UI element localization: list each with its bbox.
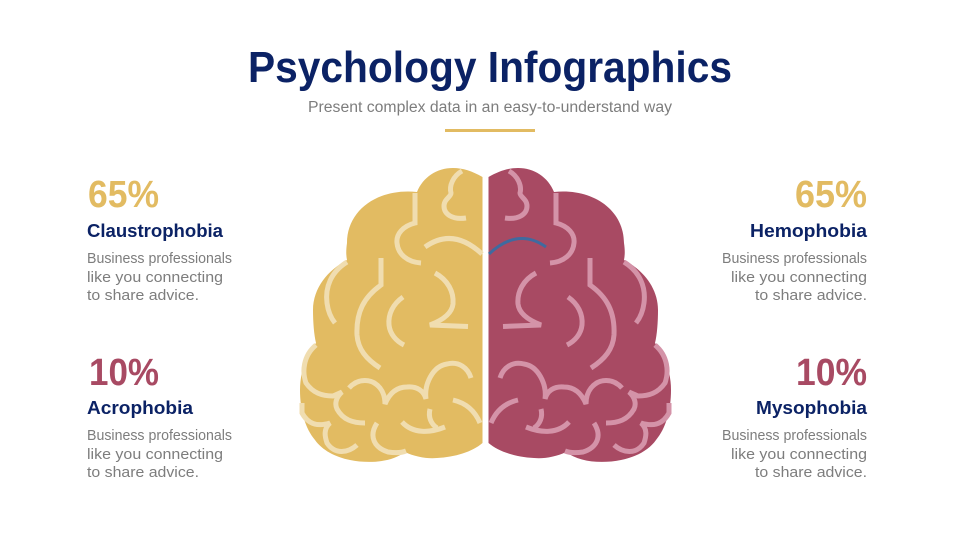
- text: mysophobia description: like you connecting: [731, 446, 867, 463]
- text: mysophobia description: [722, 427, 867, 481]
- brain left hemisphere: [300, 168, 482, 462]
- heading: mysophobia: Mysophobia: [756, 398, 868, 418]
- panel: claustrophobia: [87, 174, 232, 304]
- panel: acrophobia: [87, 352, 232, 481]
- stat: 10% left: 10%: [89, 352, 159, 394]
- stat: 10% right: 10%: [796, 352, 867, 394]
- stat: 65% left: 65%: [88, 174, 159, 216]
- text: acrophobia description: like you connecting: [87, 446, 223, 463]
- text: acrophobia description: Business professionals: [87, 427, 232, 444]
- text: mysophobia description: Business professionals: [722, 427, 867, 444]
- text: mysophobia description: to share advice.: [755, 464, 867, 481]
- text: acrophobia description: [87, 427, 232, 481]
- icon: brain: [300, 168, 671, 462]
- text: hemophobia description: to share advice.: [755, 287, 867, 304]
- heading: claustrophobia: Claustrophobia: [87, 221, 224, 241]
- subtitle: Present complex data in an easy-to-understand way: [308, 99, 672, 116]
- text: claustrophobia description: to share advice.: [87, 287, 199, 304]
- text: claustrophobia description: Business professionals: [87, 250, 232, 267]
- text: claustrophobia description: [87, 250, 232, 304]
- text: hemophobia description: Business professionals: [722, 250, 867, 267]
- text: acrophobia description: to share advice.: [87, 464, 199, 481]
- heading: acrophobia: Acrophobia: [87, 398, 194, 418]
- panel: hemophobia: [722, 174, 868, 304]
- title underline: [445, 129, 535, 132]
- heading: hemophobia: Hemophobia: [750, 221, 868, 241]
- title: Psychology Infographics: [248, 43, 732, 92]
- text: hemophobia description: [722, 250, 867, 304]
- text: claustrophobia description: like you connecting: [87, 269, 223, 286]
- panel: mysophobia: [722, 352, 868, 481]
- stat: 65% right: 65%: [795, 174, 867, 216]
- brain right hemisphere: [488, 168, 671, 462]
- text: hemophobia description: like you connecting: [731, 269, 867, 286]
